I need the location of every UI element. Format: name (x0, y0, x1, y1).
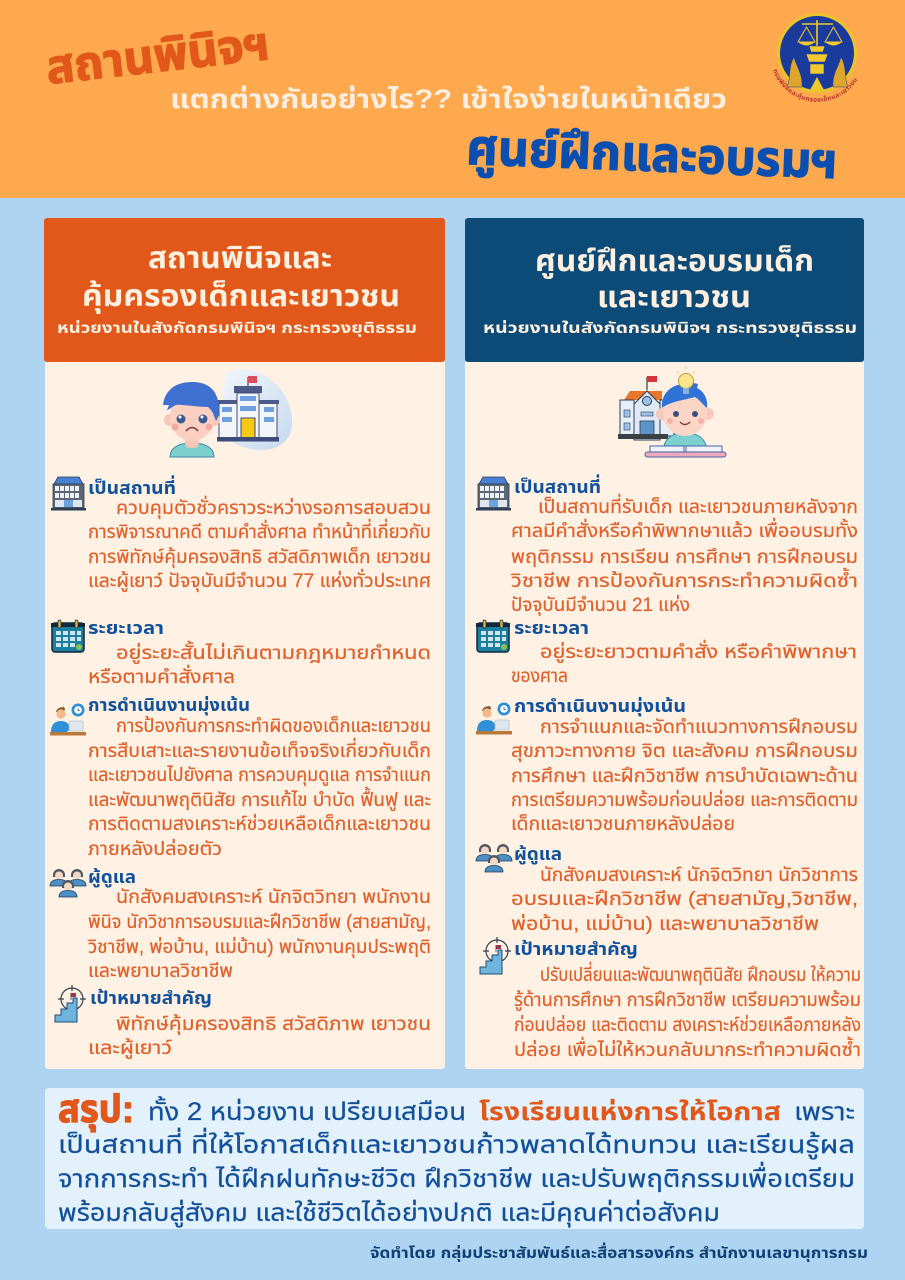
section: เป้าหมายสำคัญ: ปล่อย เพื่อไม่ให้หวนกลับมากระทำความผิดซ้ำ (514, 1036, 861, 1061)
section: การดำเนินงานมุ่งเน้น: การศึกษา และฝึกวิชาชีพ การบำบัดเฉพาะด้าน (511, 764, 858, 787)
summary text: โรงเรียนแห่งการให้โอกาส (479, 1098, 781, 1126)
section: เป้าหมายสำคัญ: เป้าหมายสำคัญ (514, 939, 638, 959)
section: เป้าหมายสำคัญ: และผู้เยาว์ (88, 1036, 172, 1060)
section: ระยะเวลา: หรือตามคำสั่งศาล (88, 664, 235, 688)
right panel header: หน่วยงานในสังกัดกรมพินิจฯ กระทรวงยุติธรรม (483, 319, 857, 337)
right panel header (465, 218, 864, 362)
summary text (58, 1095, 855, 1228)
section: ผู้ดูแล: นักสังคมสงเคราะห์ นักจิตวิทยา พนักงาน (116, 887, 431, 908)
section: ระยะเวลา: ระยะเวลา (514, 618, 589, 638)
panel: left column สถานพินิจ (44, 218, 445, 1069)
section: การดำเนินงานมุ่งเน้น: การติดตามสงเคราะห์ช่วยเหลือเด็กและเยาวชน (88, 812, 431, 835)
section: เป็นสถานที่: เป็นสถานที่ (88, 475, 176, 498)
section: ระยะเวลา (51, 618, 431, 688)
section: เป็นสถานที่: พฤติกรรม การเรียน การศึกษา การฝึกอบรม (511, 547, 858, 568)
section: ผู้ดูแล: ผู้ดูแล (88, 867, 136, 888)
section: เป็นสถานที่: การพิทักษ์คุ้มครองสิทธิ สวัสดิภาพเด็ก เยาวชน (88, 545, 431, 568)
summary text: พร้อมกลับสู่สังคม และใช้ชีวิตได้อย่างปกติ และมีคุณค่าต่อสังคม (58, 1199, 720, 1228)
panel: right column ศูนย์ฝึก (465, 218, 864, 1069)
left panel header (44, 218, 445, 362)
right panel header: ศูนย์ฝึกและอบรมเด็ก (535, 244, 814, 279)
section: การดำเนินงานมุ่งเน้น: และพัฒนาพฤตินิสัย การแก้ไข บำบัด ฟื้นฟู และ (88, 786, 431, 812)
left panel body (45, 360, 445, 1069)
section: การดำเนินงานมุ่งเน้น: การดำเนินงานมุ่งเน้น (88, 695, 250, 716)
section: เป็นสถานที่: ควบคุมตัวชั่วคราวระหว่างรอการสอบสวน (116, 495, 431, 519)
section: การดำเนินงานมุ่งเน้น: เด็กและเยาวชนภายหลังปล่อย (511, 812, 735, 835)
section: เป็นสถานที่: และผู้เยาว์ ปัจจุบันมีจำนวน 77 แห่งทั่วประเทศ (88, 568, 431, 593)
section: ระยะเวลา: อยู่ระยะสั้นไม่เกินตามกฎหมายกำหนด (116, 640, 431, 665)
section: การดำเนินงานมุ่งเน้น (50, 695, 431, 860)
section: เป้าหมายสำคัญ: ปรับเปลี่ยนและพัฒนาพฤตินิสัย ฝึกอบรม ให้ความ (540, 961, 861, 986)
section: เป้าหมายสำคัญ: รู้ด้านการศึกษา การฝึกวิชาชีพ เตรียมความพร้อม (514, 988, 861, 1012)
header band (0, 0, 905, 198)
footer credit: จัดทำโดย กลุ่มประชาสัมพันธ์และสื่อสารองค์กร สำนักงานเลขานุการกรม (370, 1242, 868, 1262)
section: เป้าหมายสำคัญ: พิทักษ์คุ้มครองสิทธิ สวัสดิภาพ เยาวชน (116, 1012, 431, 1035)
section: เป็นสถานที่ (476, 474, 858, 616)
section: ผู้ดูแล: พินิจ นักวิชาการอบรมและฝึกวิชาชีพ (สายสามัญ, (88, 912, 431, 933)
section: การดำเนินงานมุ่งเน้น: ภายหลังปล่อยตัว (88, 837, 222, 860)
summary text: เป็นสถานที่ ที่ให้โอกาสเด็กและเยาวชนก้าวพลาดได้ทบทวน และเรียนรู้ผล (58, 1127, 855, 1160)
section: ผู้ดูแล: อบรมและฝึกวิชาชีพ (สายสามัญ,วิชาชีพ, (511, 889, 858, 910)
section: ระยะเวลา: อยู่ระยะยาวตามคำสั่ง หรือคำพิพากษา (540, 639, 857, 664)
section: การดำเนินงานมุ่งเน้น: และเยาวชนไปยังศาล การควบคุมดูแล การจำแนก (88, 765, 431, 787)
section: ผู้ดูแล (50, 867, 431, 982)
panel: summary (45, 1088, 864, 1229)
summary text: จากการกระทำ ได้ฝึกฝนทักษะชีวิต ฝึกวิชาชีพ และปรับพฤติกรรมเพื่อเตรียม (58, 1161, 855, 1193)
section: ผู้ดูแล: และพยาบาลวิชาชีพ (88, 961, 233, 982)
section: ผู้ดูแล (476, 844, 858, 935)
summary text: ทั้ง 2 หน่วยงาน เปรียบเสมือน (148, 1095, 466, 1126)
section: ระยะเวลา (476, 618, 857, 687)
left panel header: หน่วยงานในสังกัดกรมพินิจฯ กระทรวงยุติธรรม (57, 319, 417, 337)
section: เป็นสถานที่: เป็นสถานที่รับเด็ก และเยาวชนภายหลังจาก (538, 493, 858, 518)
right panel body (465, 360, 864, 1069)
section: ระยะเวลา: ระยะเวลา (88, 618, 164, 638)
section: เป็นสถานที่: เป็นสถานที่ (514, 474, 601, 497)
section: เป้าหมายสำคัญ (480, 937, 861, 1061)
illustration: sad boy with building (163, 369, 292, 457)
section: เป้าหมายสำคัญ: เป้าหมายสำคัญ (90, 988, 212, 1008)
section: เป็นสถานที่: ศาลมีคำสั่งหรือคำพิพากษาแล้ว เพื่ออบรมทั้ง (511, 517, 858, 542)
section: การดำเนินงานมุ่งเน้น: การจำแนกและจัดทำแนวทางการฝึกอบรม (540, 717, 858, 738)
summary text: เพราะ (794, 1098, 855, 1126)
left panel header: คุ้มครองเด็กและเยาวชน (82, 279, 400, 314)
section: เป็นสถานที่: วิชาชีพ การป้องกันการกระทำความผิดซ้ำ (510, 567, 858, 592)
section: การดำเนินงานมุ่งเน้น: สุขภาวะทางกาย จิต และสังคม การฝึกอบรม (511, 741, 858, 762)
section: ผู้ดูแล: วิชาชีพ, พ่อบ้าน, แม่บ้าน) พนักงานคุมประพฤติ (88, 935, 431, 958)
section: เป็นสถานที่ (51, 475, 431, 593)
header title: สถานพินิจฯ: สถานพินิจฯ (43, 16, 272, 94)
header title: ศูนย์ฝึกและอบรมฯ: ศูนย์ฝึกและอบรมฯ (466, 121, 838, 191)
section: เป็นสถานที่: ปัจจุบันมีจำนวน 21 แห่ง (511, 593, 690, 616)
logo: department seal: กรมพินิจและคุ้มครองเด็กและเยาวชน (773, 69, 858, 102)
left panel header: สถานพินิจและ (148, 242, 332, 275)
section: เป็นสถานที่: การพิจารณาคดี ตามคำสั่งศาล ทำหน้าที่เกี่ยวกับ (88, 518, 431, 543)
logo: department seal (773, 13, 858, 102)
header subtitle: แตกต่างกันอย่างไร?? เข้าใจง่ายในหน้าเดียว (170, 84, 727, 114)
section: การดำเนินงานมุ่งเน้น (476, 696, 858, 835)
section: การดำเนินงานมุ่งเน้น: การป้องกันการกระทำผิดของเด็กและเยาวชน (116, 716, 431, 737)
section: เป้าหมายสำคัญ (55, 985, 431, 1060)
summary label: สรุป: (58, 1089, 134, 1132)
section: ผู้ดูแล: ผู้ดูแล (514, 844, 562, 865)
illustration: smiling boy with school and book (618, 366, 726, 457)
section: การดำเนินงานมุ่งเน้น: การดำเนินงานมุ่งเน้น (514, 696, 686, 717)
right panel header: และเยาวชน (597, 281, 751, 314)
section: ผู้ดูแล: นักสังคมสงเคราะห์ นักจิตวิทยา นักวิชาการ (540, 865, 858, 886)
section: การดำเนินงานมุ่งเน้น: การเตรียมความพร้อมก่อนปล่อย และการติดตาม (511, 788, 858, 811)
section: เป้าหมายสำคัญ: ก่อนปล่อย และติดตาม สงเคราะห์ช่วยเหลือภายหลัง (514, 1013, 861, 1036)
section: การดำเนินงานมุ่งเน้น: การสืบเสาะและรายงานข้อเท็จจริงเกี่ยวกับเด็ก (88, 737, 431, 762)
section: ระยะเวลา: ของศาล (511, 666, 568, 687)
section: ผู้ดูแล: พ่อบ้าน, แม่บ้าน) และพยาบาลวิชาชีพ (511, 912, 819, 935)
